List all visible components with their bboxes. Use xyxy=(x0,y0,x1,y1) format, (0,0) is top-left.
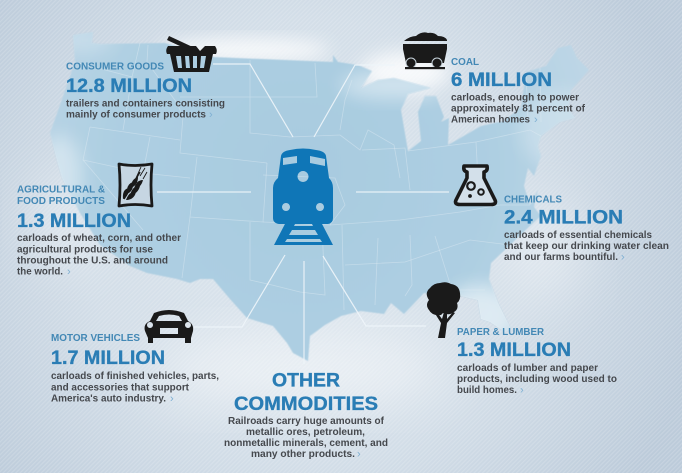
icon: shopping basket xyxy=(166,36,217,72)
text block: paper and lumber xyxy=(457,362,617,396)
heading: paper and lumber: PAPER & LUMBER xyxy=(457,326,544,338)
text block: paper and lumber: products, including wood used to xyxy=(457,373,617,385)
text block: motor vehicles: carloads of finished vehicles, parts, xyxy=(51,370,219,382)
text block: agriculture: carloads of wheat, corn, and other xyxy=(17,232,181,244)
icon: flask xyxy=(456,166,496,204)
text block: coal: › xyxy=(534,114,538,126)
map of the United States xyxy=(50,32,589,361)
text block: coal xyxy=(451,92,585,126)
icon: car xyxy=(145,310,193,343)
heading: agricultural and food products xyxy=(17,184,105,207)
text block: consumer goods xyxy=(66,98,225,121)
text block: other commodities: › xyxy=(357,448,361,460)
text block: other commodities: nonmetallic minerals, cement, and xyxy=(224,437,388,449)
panel: coal xyxy=(403,32,585,126)
heading: agricultural and food products: AGRICULTURAL & xyxy=(17,184,105,196)
icon: tree xyxy=(427,282,460,338)
text block: consumer goods: trailers and containers consisting xyxy=(66,98,225,110)
state borders xyxy=(75,43,541,310)
panel: consumer goods xyxy=(66,36,225,121)
text block: chemicals: › xyxy=(621,252,625,264)
heading: other commodities: OTHER xyxy=(272,370,340,392)
icon: central locomotive xyxy=(273,148,333,245)
heading: coal: COAL xyxy=(451,56,480,68)
icon: grain sack xyxy=(119,164,152,206)
figure: 1.3 million: 1.3 MILLION xyxy=(17,211,131,232)
text block: agriculture: agricultural products for use xyxy=(17,244,153,256)
text block: other commodities xyxy=(224,415,388,460)
text block: motor vehicles: America's auto industry. xyxy=(51,392,166,404)
icon: coal cart xyxy=(403,32,447,69)
text block: paper and lumber: carloads of lumber and paper xyxy=(457,362,598,374)
figure: 2.4 million: 2.4 MILLION xyxy=(504,208,623,228)
text block: agriculture xyxy=(17,232,181,278)
connector lines xyxy=(157,64,449,364)
heading: other commodities: COMMODITIES xyxy=(234,394,378,415)
text block: agriculture: › xyxy=(67,266,71,278)
heading: agricultural and food products: FOOD PRODUCTS xyxy=(17,195,105,207)
figure: 6 million: 6 MILLION xyxy=(451,70,552,91)
figure: 12.8 million: 12.8 MILLION xyxy=(66,76,192,97)
figure: 1.3 million: 1.3 MILLION xyxy=(457,340,571,361)
text block: consumer goods: mainly of consumer products xyxy=(66,108,206,120)
text block: other commodities: metallic ores, petroleum, xyxy=(246,426,365,438)
panel: agricultural and food products xyxy=(17,164,181,278)
text block: chemicals xyxy=(504,229,669,264)
map edge fades xyxy=(51,32,574,332)
heading: consumer goods: CONSUMER GOODS xyxy=(66,60,164,72)
text block: agriculture: the world. xyxy=(17,266,63,278)
text block: paper and lumber: › xyxy=(520,384,524,396)
panel: chemicals xyxy=(456,166,669,264)
heading: motor vehicles: MOTOR VEHICLES xyxy=(51,332,140,344)
text block: chemicals: and our farms bountiful. xyxy=(504,251,618,263)
text block: other commodities: Railroads carry huge amounts of xyxy=(228,415,384,427)
heading: other commodities xyxy=(234,370,378,415)
text block: motor vehicles xyxy=(51,370,219,405)
panel: paper and lumber xyxy=(427,282,617,396)
text block: coal: approximately 81 percent of xyxy=(451,102,585,114)
text block: chemicals: carloads of essential chemicals xyxy=(504,229,652,241)
text block: coal: American homes xyxy=(451,114,530,126)
text block: coal: carloads, enough to power xyxy=(451,92,579,104)
text block: paper and lumber: build homes. xyxy=(457,384,517,396)
text block: motor vehicles: › xyxy=(170,393,174,405)
heading: chemicals: CHEMICALS xyxy=(504,194,562,206)
text block: other commodities: many other products. xyxy=(251,448,355,460)
text block: agriculture: throughout the U.S. and around xyxy=(17,254,168,266)
panel: motor vehicles xyxy=(51,310,219,405)
figure: 1.7 million: 1.7 MILLION xyxy=(51,348,165,369)
text block: chemicals: that keep our drinking water clean xyxy=(504,240,669,252)
panel: other commodities xyxy=(224,370,388,460)
text block: consumer goods: › xyxy=(209,109,213,121)
text block: motor vehicles: and accessories that support xyxy=(51,382,189,394)
